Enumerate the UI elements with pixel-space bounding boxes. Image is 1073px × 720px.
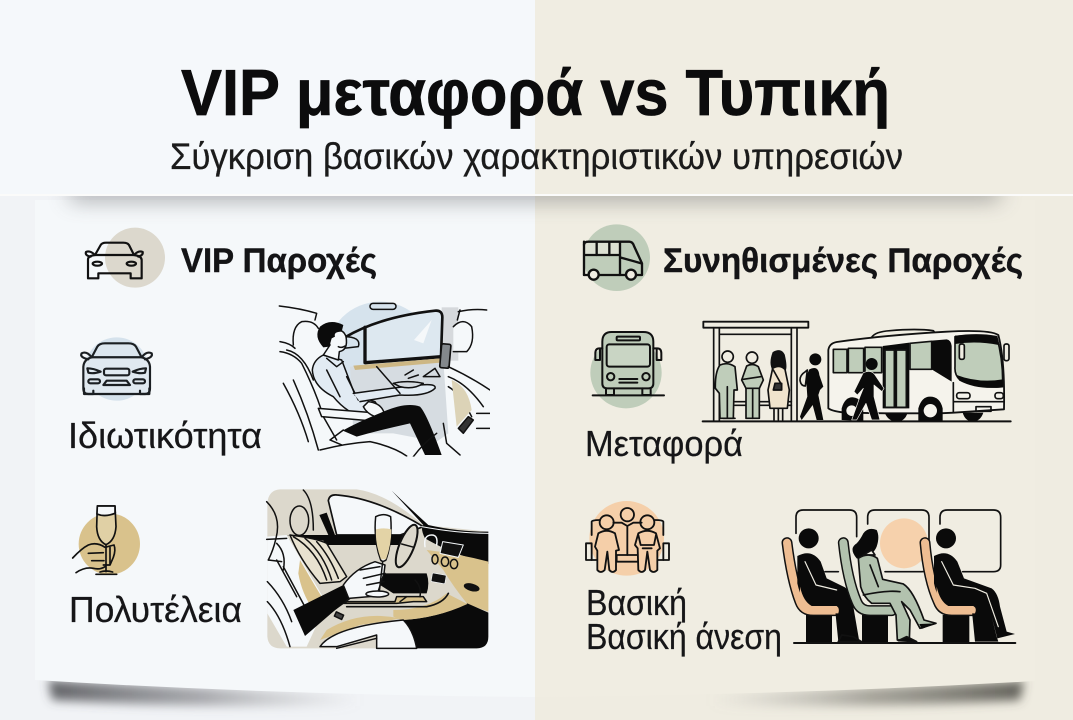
header band (0, 0, 1073, 196)
person 3 (771, 351, 786, 370)
flute (375, 515, 391, 561)
item: basic comfort (586, 501, 1015, 657)
title: VIP μεταφορά vs Τυπική (181, 56, 890, 129)
item: luxury (69, 489, 488, 648)
header shadow (70, 184, 1000, 200)
passenger 3 (936, 528, 956, 548)
label: transport: Μεταφορά (585, 423, 743, 464)
trousers (343, 405, 442, 455)
seat 3 (925, 543, 973, 611)
person 1 (722, 351, 733, 362)
boarding person (866, 358, 878, 370)
illustration: bus stop with passengers (703, 322, 1011, 422)
passenger 1 (799, 528, 819, 548)
panel: VIP background (35, 200, 535, 697)
hair (317, 322, 343, 347)
illustration: seated bus passengers (787, 510, 1015, 643)
panel: standard background (535, 200, 1035, 697)
label: basic comfort: Βασική άνεση (586, 616, 782, 657)
label: basic comfort: Βασική (586, 582, 687, 623)
seat 2 (843, 543, 892, 611)
dash details (425, 535, 437, 547)
label: luxury: Πολυτέλεια (69, 589, 242, 630)
section: standard heading (583, 224, 1023, 291)
illustration: champagne in luxury car interior (267, 489, 488, 648)
section: VIP heading (86, 228, 377, 288)
passenger 2 (852, 529, 878, 559)
walking person (809, 353, 821, 365)
man torso (312, 354, 377, 412)
label: basic comfort (586, 582, 782, 657)
panel bottom shadows (48, 680, 1024, 706)
seat 1 (787, 543, 835, 611)
icon: three seated passengers (586, 501, 669, 576)
icon: bus in green circle (583, 224, 650, 291)
item: privacy (68, 302, 490, 457)
item: transport (585, 322, 1011, 464)
heading: VIP benefits: VIP Παροχές (181, 242, 377, 280)
icon: bus front (590, 332, 664, 408)
icon: sedan front (81, 337, 152, 401)
hand (343, 562, 385, 598)
sleeve (293, 585, 349, 636)
steering wheel (391, 522, 422, 570)
icon: hand holding champagne flute (73, 506, 140, 575)
bus (872, 329, 937, 337)
illustration: passenger in private car (279, 302, 490, 457)
person 2 (746, 352, 758, 363)
subtitle: Σύγκριση βασικών χαρακτηριστικών υπηρεσιών (170, 136, 903, 177)
pedestals (806, 615, 832, 642)
label: privacy: Ιδιωτικότητα (68, 415, 262, 456)
heading: standard benefits: Συνηθισμένες Παροχές (663, 242, 1023, 280)
icon: car in tan circle (86, 228, 165, 288)
wheels (842, 397, 863, 421)
